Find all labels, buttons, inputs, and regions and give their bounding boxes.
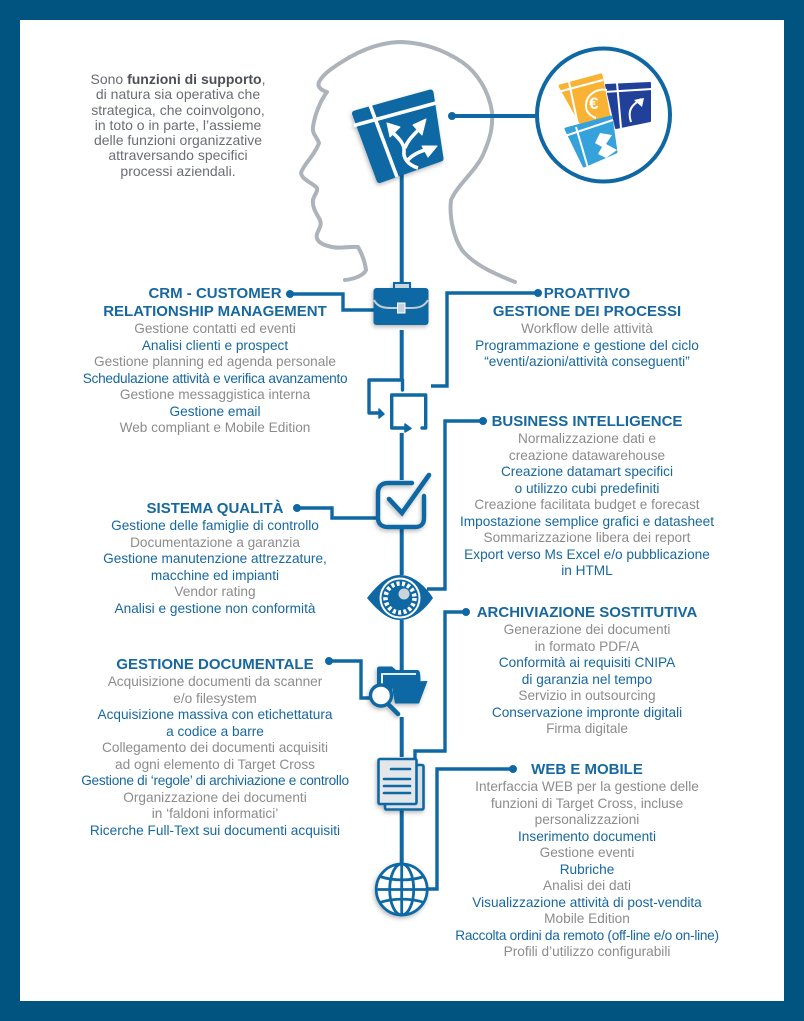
intro text: di natura sia operativa che	[96, 86, 260, 102]
panel: gestione documentale: in ‘faldoni informatici’	[152, 806, 278, 821]
intro text: strategica, che coinvolgono,	[91, 102, 265, 118]
panel: archiviazione sostitutiva: Conformità ai requisiti CNIPA	[499, 655, 675, 670]
panel: web e mobile: funzioni di Target Cross, incluse	[491, 796, 683, 811]
panel: business intelligence: Normalizzazione dati e	[518, 431, 656, 446]
panel: gestione documentale: GESTIONE DOCUMENTALE	[116, 656, 314, 673]
panel: gestione documentale: Organizzazione dei documenti	[123, 790, 307, 805]
panel: sistema qualita: Vendor rating	[174, 584, 256, 599]
panel: proattivo: Programmazione e gestione del ciclo	[475, 338, 699, 353]
panel: gestione documentale	[81, 656, 349, 838]
icon: documents	[378, 759, 424, 810]
intro text	[90, 71, 266, 179]
intro text: Sono funzioni di supporto,	[90, 71, 266, 87]
panel: archiviazione sostitutiva: Firma digitale	[546, 721, 628, 736]
panel: sistema qualita: Analisi e gestione non conformità	[115, 601, 315, 616]
panel: sistema qualita	[103, 500, 327, 616]
panel: archiviazione sostitutiva: Generazione dei documenti	[504, 622, 670, 637]
circle with modules	[537, 48, 670, 182]
intro text: delle funzioni organizzative	[94, 132, 262, 148]
panel: CRM: Gestione email	[170, 404, 260, 419]
intro text: attraversando specifici	[108, 147, 248, 163]
panel: sistema qualita: Gestione manutenzione attrezzature,	[103, 551, 327, 566]
panel: gestione documentale: Acquisizione massiva con etichettatura	[97, 707, 333, 722]
panel: archiviazione sostitutiva	[477, 604, 697, 736]
panel: gestione documentale: Gestione di ‘regole’ di archiviazione e controllo	[81, 773, 349, 788]
panel: CRM: Schedulazione attività e verifica avanzamento	[83, 371, 347, 386]
panel: archiviazione sostitutiva: di garanzia nel tempo	[522, 672, 652, 687]
panel: web e mobile: Visualizzazione attività di post-vendita	[472, 895, 702, 910]
panel: gestione documentale: Ricerche Full-Text sui documenti acquisiti	[90, 823, 340, 838]
panel: CRM: Analisi clienti e prospect	[142, 338, 288, 353]
panel: business intelligence	[460, 413, 714, 578]
panel: proattivo	[475, 285, 699, 369]
panel: archiviazione sostitutiva: in formato PDF/A	[535, 639, 639, 654]
panel: gestione documentale: e/o filesystem	[173, 691, 257, 706]
panel: business intelligence: in HTML	[561, 563, 613, 578]
panel: gestione documentale: a codice a barre	[166, 724, 264, 739]
icon: yellow module: €	[589, 94, 599, 113]
icon: light blue module	[565, 117, 617, 168]
icon: eye	[367, 575, 433, 620]
icon: globe	[376, 864, 427, 915]
panel: archiviazione sostitutiva: Conservazione impronte digitali	[492, 705, 682, 720]
panel: business intelligence: Impostazione semplice grafici e datasheet	[460, 514, 714, 529]
panel: archiviazione sostitutiva: ARCHIVIAZIONE SOSTITUTIVA	[477, 604, 697, 621]
panel: proattivo: “eventi/azioni/attività conseguenti”	[484, 354, 690, 369]
panel: business intelligence: o utilizzo cubi predefiniti	[515, 481, 659, 496]
panel: web e mobile: personalizzazioni	[535, 812, 639, 827]
panel: gestione documentale: ad ogni elemento di Target Cross	[115, 757, 315, 772]
panel: web e mobile: Mobile Edition	[544, 911, 630, 926]
panel: sistema qualita: SISTEMA QUALITÀ	[147, 500, 283, 517]
panel: sistema qualita: Gestione delle famiglie di controllo	[111, 518, 319, 533]
head outline	[301, 42, 515, 282]
panel: business intelligence: Export verso Ms Excel e/o pubblicazione	[464, 547, 710, 562]
panel: gestione documentale: Collegamento dei documenti acquisiti	[102, 740, 328, 755]
panel: business intelligence: Sommarizzazione libera dei report	[484, 530, 690, 545]
panel: proattivo: PROATTIVO	[544, 285, 630, 302]
intro text: in toto o in parte, l’assieme	[95, 117, 261, 133]
panel: proattivo: Workflow delle attività	[521, 321, 653, 336]
panel: CRM: RELATIONSHIP MANAGEMENT	[103, 303, 327, 320]
panel: sistema qualita: Documentazione a garanzia	[130, 535, 300, 550]
icon: workflow	[369, 380, 426, 432]
panel: CRM: Gestione messaggistica interna	[120, 387, 310, 402]
panel: sistema qualita: macchine ed impianti	[151, 568, 279, 583]
panel: CRM: Gestione planning ed agenda personale	[94, 354, 336, 369]
panel: web e mobile: Analisi dei dati	[543, 878, 631, 893]
connector dots	[286, 112, 542, 773]
panel: web e mobile: Gestione eventi	[540, 845, 634, 860]
panel: archiviazione sostitutiva: Servizio in outsourcing	[518, 688, 656, 703]
panel: web e mobile: Raccolta ordini da remoto (off-line e/o on-line)	[455, 928, 719, 943]
panel: web e mobile: Interfaccia WEB per la gestione delle	[475, 779, 699, 794]
panel: CRM: CRM - CUSTOMER	[148, 285, 282, 302]
panel: web e mobile: Rubriche	[560, 862, 614, 877]
panel: CRM	[83, 285, 347, 435]
icon: check box	[378, 475, 429, 527]
panel: business intelligence: Creazione datamart specifici	[501, 464, 673, 479]
panel: business intelligence: creazione datawarehouse	[509, 448, 665, 463]
icon: briefcase	[374, 283, 428, 325]
panel: web e mobile: WEB E MOBILE	[531, 761, 643, 778]
intro text: processi aziendali.	[120, 163, 236, 179]
panel: CRM: Gestione contatti ed eventi	[134, 321, 296, 336]
panel: web e mobile: Profili d’utilizzo configurabili	[504, 944, 670, 959]
icon: main window with arrows	[354, 92, 440, 180]
panel: business intelligence: BUSINESS INTELLIGENCE	[492, 413, 682, 430]
panel: proattivo: GESTIONE DEI PROCESSI	[493, 303, 681, 320]
panel: web e mobile: Inserimento documenti	[518, 829, 656, 844]
panel: CRM: Web compliant e Mobile Edition	[120, 420, 310, 435]
connectors	[290, 116, 538, 889]
panel: gestione documentale: Acquisizione documenti da scanner	[108, 674, 322, 689]
panel: business intelligence: Creazione facilitata budget e forecast	[474, 497, 700, 512]
icon: navy module	[604, 83, 652, 128]
panel: web e mobile	[455, 761, 719, 959]
icon: folder with magnifier	[370, 666, 428, 714]
